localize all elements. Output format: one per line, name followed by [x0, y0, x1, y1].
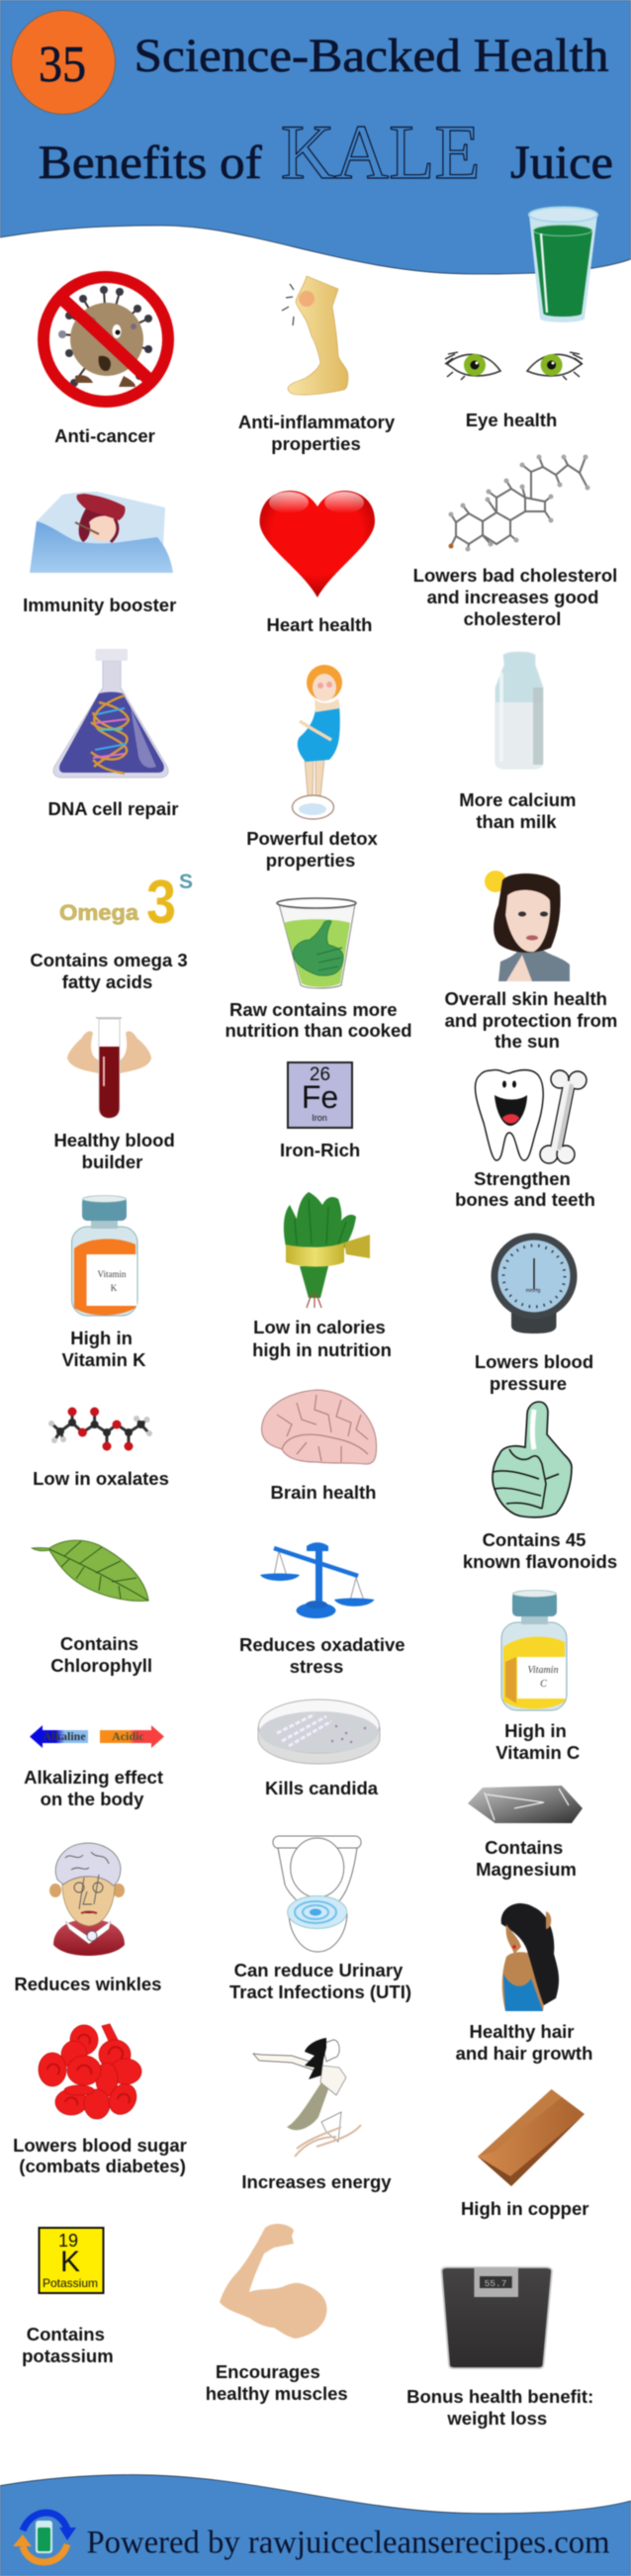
panel: eye health	[445, 352, 583, 430]
icon: leaping woman	[253, 2038, 361, 2157]
label: Brain health	[271, 1482, 376, 1503]
icon: Fe element tile	[288, 1062, 352, 1128]
panel: dna cell repair	[48, 649, 178, 819]
panel: chlorophyll	[32, 1540, 152, 1676]
panel: vitamin K	[62, 1195, 146, 1370]
label: High in	[70, 1328, 133, 1348]
panel: hair	[456, 1903, 592, 2064]
label: Healthy hair	[470, 2021, 574, 2042]
panel: flavonoids	[463, 1402, 617, 1572]
icon: omega 3 logo: S	[179, 871, 193, 893]
label: Vitamin K	[62, 1349, 146, 1370]
panel: skin health	[444, 871, 617, 1052]
label: Low in calories	[253, 1317, 386, 1337]
icon: green cup with thumbs up	[277, 898, 356, 988]
panel: vitamin C	[496, 1591, 580, 1763]
header banner	[0, 0, 631, 274]
label: Tract Infections (UTI)	[229, 1981, 411, 2002]
icon: vitamin C bottle: C	[540, 1679, 547, 1690]
label: potassium	[22, 2346, 114, 2366]
icon: vitamin K bottle: K	[111, 1283, 118, 1293]
label: Reduces winkles	[14, 1974, 161, 1994]
label: and increases good	[427, 587, 598, 607]
icon: woman soaking feet	[293, 665, 342, 819]
label: Chlorophyll	[50, 1655, 152, 1676]
panel: heart health	[259, 491, 375, 635]
label: Contains	[485, 1837, 563, 1858]
label: properties	[266, 850, 355, 871]
panel: raw nutrition	[225, 898, 412, 1041]
icon: K element tile: 19	[58, 2231, 78, 2251]
label: Increases energy	[241, 2171, 392, 2192]
label: Overall skin health	[444, 988, 607, 1009]
label: than milk	[476, 811, 557, 832]
label: and hair growth	[456, 2043, 592, 2064]
label: Eye health	[466, 410, 557, 430]
label: Strengthen	[474, 1168, 571, 1189]
panel: weight loss	[406, 2267, 593, 2429]
label: Can reduce Urinary	[234, 1960, 404, 1980]
icon: leg with sore knee	[282, 276, 348, 395]
title	[39, 30, 613, 195]
label: fatty acids	[62, 971, 152, 992]
number badge: 35	[12, 10, 115, 115]
label: Vitamin C	[496, 1742, 580, 1763]
panel: potassium	[22, 2228, 114, 2366]
icon: flask with DNA	[53, 649, 168, 778]
panel: healthy blood builder	[53, 1018, 175, 1172]
panel: magnesium	[468, 1786, 583, 1880]
panel: low in oxalates	[33, 1407, 169, 1489]
icon: red blood cells	[39, 2024, 141, 2119]
icon: Fe element tile: Iron	[312, 1113, 327, 1123]
label: bones and teeth	[455, 1189, 595, 1210]
icon: omega 3 logo: 3	[146, 869, 176, 937]
icon: toilet	[273, 1836, 361, 1952]
label: Healthy blood	[53, 1130, 175, 1150]
panel: blood sugar	[13, 2024, 187, 2176]
label: DNA cell repair	[48, 798, 178, 819]
title: Juice	[510, 137, 613, 189]
label: Lowers bad cholesterol	[413, 565, 617, 586]
icon: green leaf	[32, 1540, 148, 1601]
panel: oxidative stress	[239, 1542, 406, 1677]
icon: kale with measuring tape	[284, 1192, 370, 1308]
icon: copper ingot	[478, 2089, 585, 2186]
icon: muscular test tube	[67, 1018, 151, 1118]
icon: oxalate molecule	[48, 1407, 152, 1450]
panel: bones and teeth	[455, 1070, 595, 1210]
label: Iron-Rich	[280, 1140, 360, 1160]
icon: tooth and bone	[475, 1070, 586, 1163]
label: Powerful detox	[246, 828, 379, 849]
panel: brain health	[261, 1390, 377, 1503]
panel: reduces wrinkles	[14, 1843, 161, 1994]
label: cholesterol	[464, 608, 561, 629]
label: Contains 45	[483, 1529, 586, 1550]
icon: vitamin K bottle	[71, 1195, 137, 1316]
panel: low in calories	[252, 1192, 392, 1360]
panel: more calcium	[459, 652, 577, 832]
panel: iron-rich	[280, 1062, 360, 1160]
title: Science-Backed Health	[135, 30, 609, 82]
label: Contains	[27, 2324, 105, 2345]
label: Magnesium	[476, 1859, 577, 1880]
icon: pressure gauge	[491, 1233, 578, 1334]
icon: glass of green juice	[529, 208, 597, 322]
icon: woman with sun	[485, 871, 570, 981]
icon: omega 3 logo: Omega	[59, 900, 139, 925]
icon: bathroom scale	[441, 2267, 552, 2368]
number badge: 35: 35	[39, 37, 86, 93]
icon: brain	[261, 1390, 377, 1464]
panel: healthy muscles	[206, 2224, 348, 2404]
label: properties	[271, 433, 361, 454]
label: Lowers blood	[475, 1351, 593, 1372]
panel: copper	[461, 2089, 588, 2219]
footer banner	[0, 2475, 631, 2576]
icon: sick person in bed	[30, 492, 173, 573]
label: pressure	[490, 1373, 567, 1394]
icon: vitamin C bottle: Vitamin	[528, 1665, 558, 1676]
label: Contains	[60, 1633, 138, 1654]
icon: green eyes	[445, 352, 583, 380]
icon: Fe element tile: 26	[310, 1064, 330, 1085]
label: Contains omega 3	[30, 950, 188, 970]
icon: alkaline and acidic arrows: Acidic	[112, 1729, 144, 1743]
icon: pressure gauge: mmHg	[526, 1288, 541, 1294]
title: Benefits of	[39, 137, 262, 189]
icon: bathroom scale: 55.7	[485, 2278, 506, 2289]
footer text: Powered by rawjuicecleanserecipes.com	[87, 2526, 610, 2561]
panel: kills candida	[258, 1700, 380, 1798]
label: More calcium	[459, 789, 577, 810]
label: Lowers blood sugar	[13, 2135, 187, 2156]
label: and protection from	[445, 1010, 617, 1031]
label: (combats diabetes)	[19, 2156, 186, 2176]
title: KALE	[281, 109, 481, 195]
label: Anti-cancer	[54, 425, 155, 446]
icon: cholesterol molecule	[449, 455, 589, 552]
icon: woman with long hair	[501, 1903, 559, 2011]
panel: anti-cancer	[44, 277, 168, 446]
label: weight loss	[446, 2408, 547, 2429]
icon: alkaline and acidic arrows: Alkaline	[43, 1729, 86, 1743]
label: High in copper	[461, 2198, 588, 2219]
label: High in	[504, 1720, 567, 1741]
icon: K element tile: Potassium	[43, 2276, 98, 2290]
icon: K element tile: K	[60, 2246, 80, 2278]
label: on the body	[41, 1789, 144, 1809]
label: builder	[82, 1151, 142, 1172]
label: known flavonoids	[463, 1551, 617, 1572]
label: Low in oxalates	[33, 1468, 169, 1489]
icon: omega 3 logo	[59, 869, 193, 937]
label: Encourages	[216, 2361, 320, 2382]
icon: K element tile	[40, 2228, 103, 2293]
icon: balance scale	[260, 1542, 374, 1618]
label: Kills candida	[265, 1778, 379, 1798]
icon: crossed-out cancer cell	[44, 277, 168, 402]
panel: alkalizing effect	[24, 1725, 164, 1809]
label: Anti-inflammatory	[238, 412, 396, 432]
icon: glossy heart	[259, 491, 375, 598]
label: the sun	[495, 1031, 560, 1052]
icon: vitamin K bottle: Vitamin	[98, 1269, 127, 1279]
panel: increases energy	[241, 2038, 392, 2192]
panel: immunity booster	[23, 492, 176, 615]
panel: omega 3	[30, 869, 193, 992]
icon: petri dish	[258, 1700, 380, 1764]
label: Heart health	[267, 614, 372, 635]
label: stress	[290, 1656, 343, 1677]
icon: milk bottle	[496, 652, 543, 769]
icon: flexed arm	[220, 2224, 327, 2339]
label: healthy muscles	[206, 2383, 348, 2404]
icon: juice recycle logo	[13, 2513, 76, 2562]
icon: magnesium rock	[468, 1786, 583, 1823]
label: Bonus health benefit:	[406, 2386, 593, 2407]
panel: blood pressure	[475, 1233, 593, 1394]
label: high in nutrition	[252, 1339, 392, 1360]
panel: urinary tract	[229, 1836, 411, 2002]
label: nutrition than cooked	[225, 1020, 412, 1041]
panel: anti-inflammatory	[238, 276, 396, 454]
icon: pale green thumbs up	[493, 1402, 572, 1518]
panel: lowers bad cholesterol	[413, 455, 617, 629]
label: Raw contains more	[229, 999, 398, 1020]
label: Reduces oxadative	[239, 1634, 406, 1655]
icon: alkaline and acidic arrows	[30, 1725, 164, 1748]
label: Alkalizing effect	[24, 1767, 163, 1788]
icon: vitamin C bottle	[501, 1591, 567, 1710]
icon: Fe element tile: Fe	[302, 1079, 338, 1115]
panel: powerful detox	[246, 665, 379, 871]
label: Immunity booster	[23, 595, 176, 615]
icon: old lady	[49, 1843, 125, 1956]
